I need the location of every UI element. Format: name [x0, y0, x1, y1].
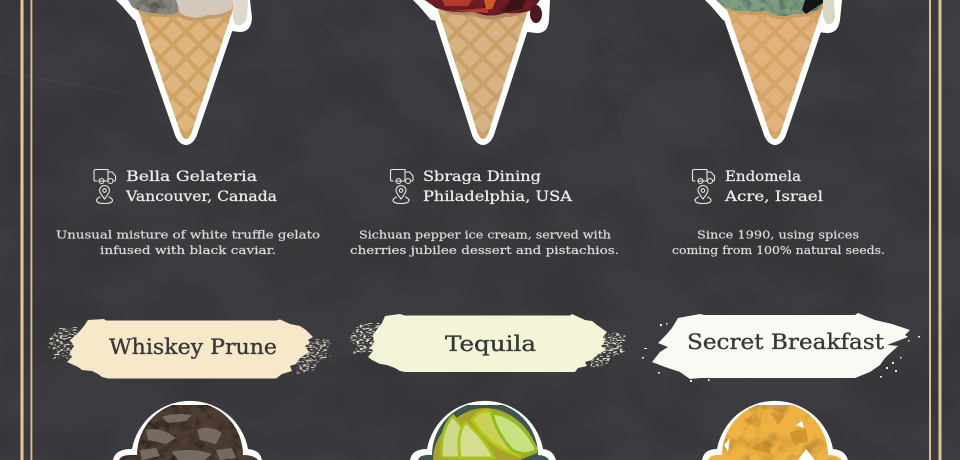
- ice cream cone 3: spices and seeds: [705, 0, 842, 139]
- icon: truck: [390, 170, 413, 184]
- banner label: Secret Breakfast: [687, 330, 885, 354]
- venue 2 details: [350, 169, 619, 257]
- description: coming from 100% natural seeds.: [672, 244, 885, 257]
- venue name: Endomela: [725, 169, 801, 185]
- lime slices: [441, 411, 537, 458]
- venue name: Bella Gelateria: [126, 169, 257, 185]
- description: [350, 228, 619, 257]
- description: Sichuan pepper ice cream, served with: [359, 228, 611, 242]
- description: Unusual misture of white truffle gelato: [56, 228, 320, 242]
- banner: Secret Breakfast: [642, 313, 920, 382]
- venue location: Acre, Israel: [724, 189, 824, 205]
- venue location: Philadelphia, USA: [423, 189, 573, 205]
- banner: Tequila: [350, 314, 627, 372]
- venue 3 details: [672, 169, 885, 257]
- description: Since 1990, using spices: [697, 228, 859, 242]
- icon: truck: [94, 170, 116, 184]
- icon: location pin: [393, 186, 409, 204]
- icon: location pin: [96, 186, 112, 204]
- scoop: tequila lime: [410, 401, 556, 460]
- venue 1 details: [56, 169, 320, 257]
- ice cream cone 2: sichuan pepper and cherries: [413, 0, 550, 139]
- banner label: Tequila: [445, 332, 536, 356]
- description: [672, 228, 885, 257]
- venue name: Sbraga Dining: [423, 169, 541, 185]
- banner label: Whiskey Prune: [109, 335, 277, 359]
- venue location: Vancouver, Canada: [125, 189, 277, 205]
- description: cherries jubilee dessert and pistachios.: [350, 244, 619, 257]
- icon: truck: [692, 170, 714, 184]
- ice cream cone 1: white truffle and caviar: [116, 0, 252, 139]
- banner: Whiskey Prune: [48, 318, 332, 378]
- icon: location pin: [695, 186, 711, 204]
- description: [56, 228, 320, 257]
- scoop: whiskey prune: [113, 401, 262, 460]
- description: infused with black caviar.: [100, 244, 276, 257]
- scoop: secret breakfast cornflakes: [702, 401, 848, 460]
